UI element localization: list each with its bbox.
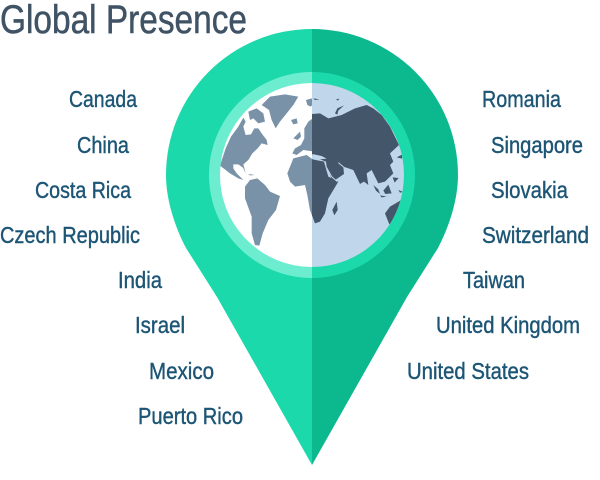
Slovakia: Slovakia <box>491 177 568 203</box>
China: China <box>77 132 129 158</box>
Puerto Rico: Puerto Rico <box>138 403 243 429</box>
map pin <box>166 29 458 465</box>
western hemisphere land <box>220 94 315 246</box>
country list right <box>407 86 589 384</box>
pin right half <box>312 29 458 465</box>
ring right half <box>312 72 415 278</box>
United States: United States <box>407 358 529 384</box>
continents <box>220 94 403 246</box>
Romania: Romania <box>482 86 561 112</box>
eastern hemisphere land <box>307 98 403 224</box>
Israel: Israel <box>135 312 185 338</box>
globe ocean left <box>220 83 312 267</box>
Czech Republic: Czech Republic <box>0 222 140 248</box>
India: India <box>118 267 162 293</box>
ring left half <box>209 72 312 278</box>
globe <box>220 83 404 267</box>
Costa Rica: Costa Rica <box>35 177 131 203</box>
Taiwan: Taiwan <box>463 267 525 293</box>
country list left <box>0 86 243 429</box>
pin left half <box>166 29 312 465</box>
Canada: Canada <box>69 86 137 112</box>
Singapore: Singapore <box>491 132 583 158</box>
globe ocean right <box>312 83 404 267</box>
Mexico: Mexico <box>149 358 214 384</box>
United Kingdom: United Kingdom <box>436 312 580 338</box>
Switzerland: Switzerland <box>482 222 589 248</box>
